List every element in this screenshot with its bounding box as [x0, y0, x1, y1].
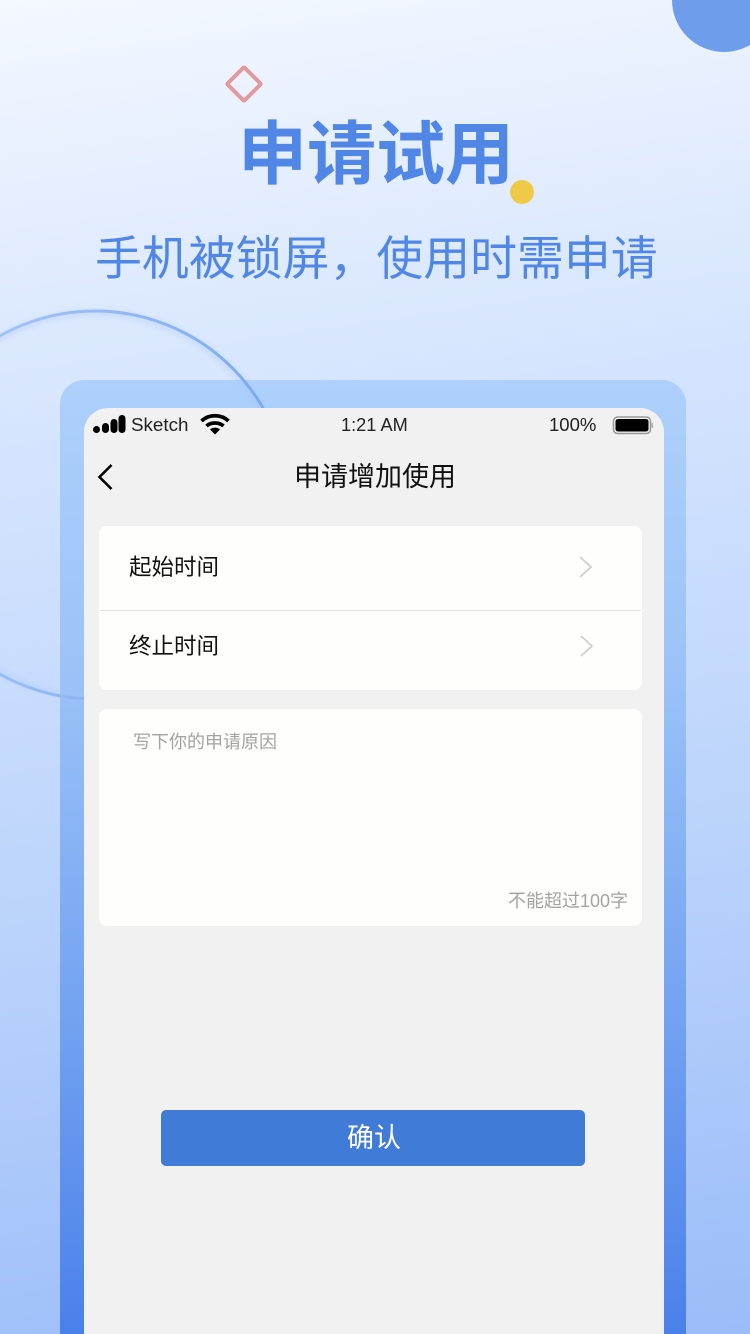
page heading: 申请增加使用 — [294, 462, 456, 492]
panel: phone frame — [60, 380, 686, 1334]
icon: battery — [612, 416, 653, 434]
button: confirm: 确认 — [347, 1123, 401, 1153]
icon: wifi — [200, 414, 230, 434]
status bar — [93, 414, 653, 435]
subtitle: 手机被锁屏，使用时需申请 — [95, 233, 658, 285]
icon: signal bars — [93, 415, 126, 433]
icon: pink diamond — [224, 64, 264, 104]
carrier name: Sketch — [131, 414, 188, 435]
battery percent: 100% — [549, 414, 596, 435]
character limit: 不能超过100字 — [508, 891, 628, 911]
panel: time fields — [99, 526, 642, 690]
title: 申请试用 — [238, 116, 514, 193]
label: end time: 终止时间 — [129, 634, 219, 659]
panel: reason input — [99, 709, 642, 926]
divider line — [100, 610, 641, 611]
placeholder text: 写下你的申请原因 — [133, 732, 277, 752]
panel: phone screen — [84, 408, 664, 1334]
clock: 1:21 AM — [341, 415, 408, 435]
icon: chevron start — [580, 556, 592, 578]
large ring over background and panel — [0, 310, 264, 700]
icon: yellow dot — [510, 180, 534, 204]
decorative circle top right — [672, 0, 750, 52]
label: start time: 起始时间 — [129, 555, 219, 580]
button: confirm — [161, 1110, 585, 1166]
icon: chevron end — [580, 636, 594, 656]
icon: back arrow — [98, 464, 112, 490]
